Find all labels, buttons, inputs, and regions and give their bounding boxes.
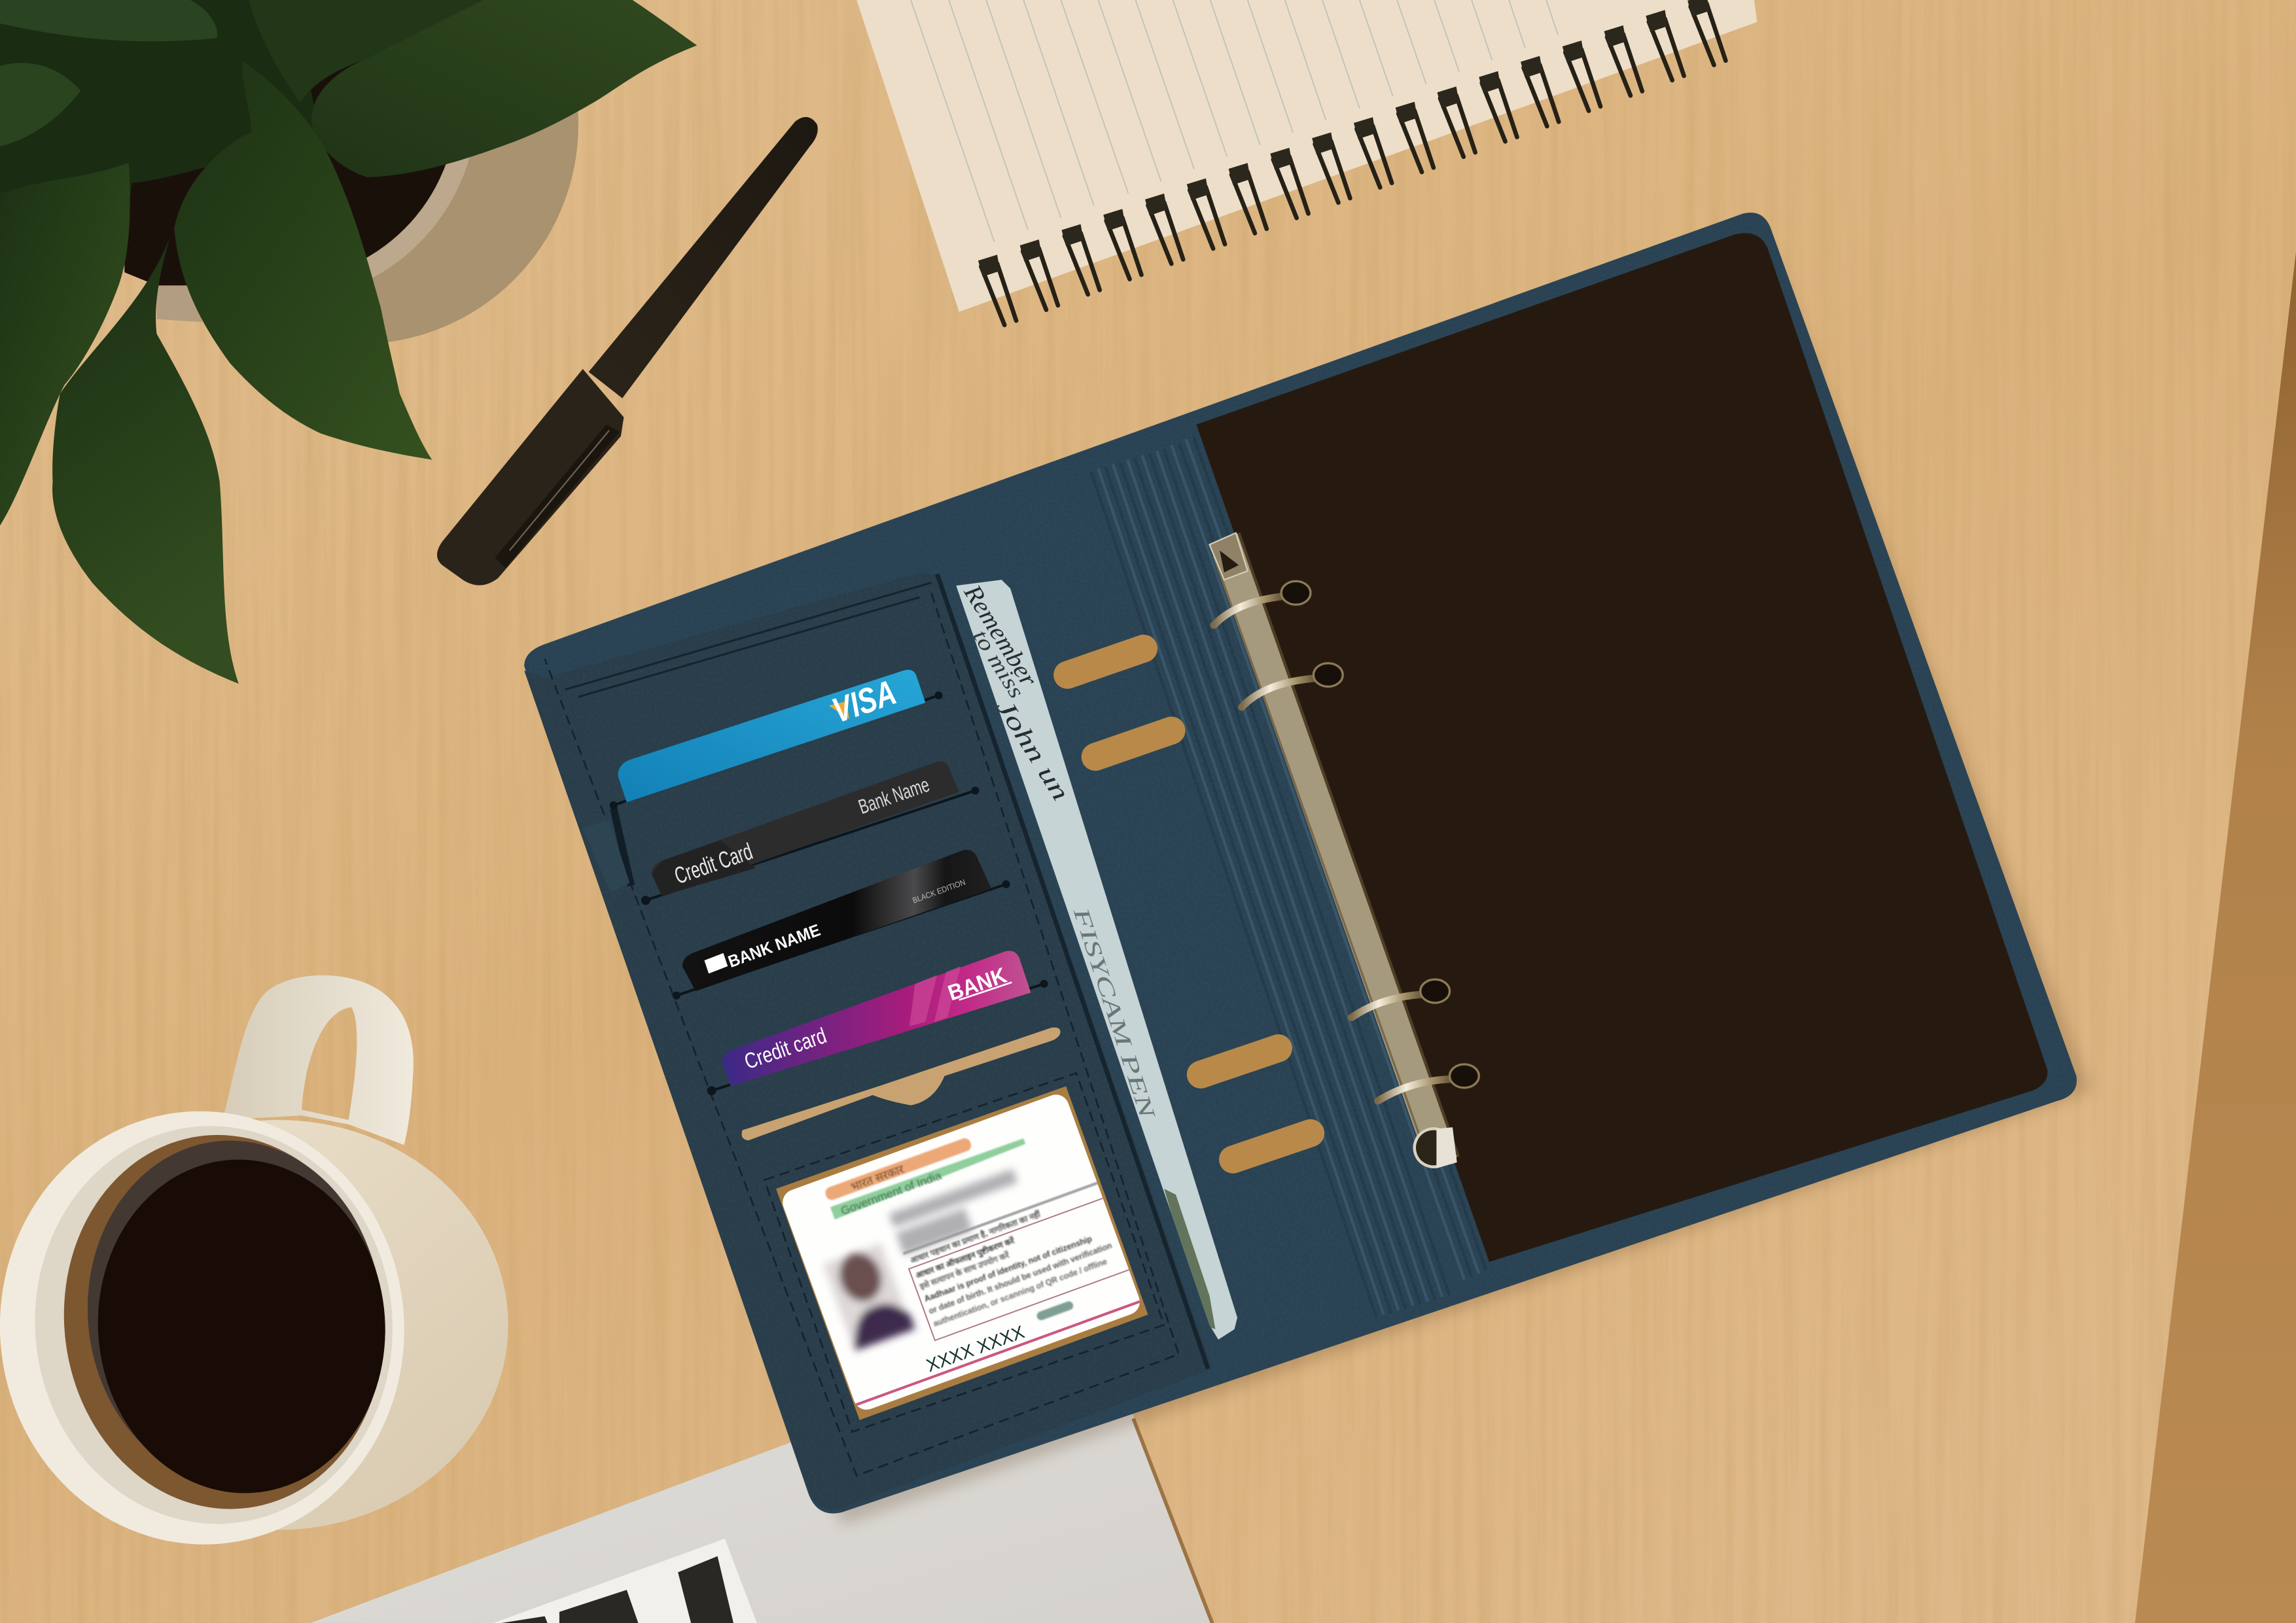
banknote print	[1164, 1189, 1215, 1329]
card: VISA	[618, 670, 925, 802]
bank name text: BANK NAME	[726, 921, 823, 971]
info box: आधार का ऑफलाइन पुष्टीकरण करें	[914, 1235, 1016, 1281]
coffee foam	[43, 1117, 405, 1527]
credit card label: Credit Card	[671, 838, 756, 889]
blurred photo	[823, 1242, 915, 1351]
footer line	[855, 1300, 1141, 1406]
note handwriting: to miss	[968, 625, 1029, 703]
coffee cup	[0, 975, 508, 1558]
info box	[903, 1178, 1141, 1340]
pot	[79, 0, 578, 344]
lower pocket flap	[614, 808, 631, 886]
organizer cover	[524, 213, 2077, 1513]
notebook ruled lines	[911, 0, 1558, 241]
leaf: top right	[311, 0, 697, 177]
binder end caps	[1209, 533, 1458, 1172]
blurred VID	[1036, 1300, 1074, 1321]
leaf: upper left	[0, 0, 217, 41]
brown paper sheet	[1196, 233, 2047, 1262]
info box: इसे सत्यापन के साथ उपयोग करें	[918, 1249, 1011, 1291]
blurred name	[889, 1169, 1028, 1255]
leather texture	[520, 205, 2087, 1522]
spiral binding	[978, 0, 1725, 325]
hindi heading: भारत सरकार	[849, 1162, 906, 1194]
note handwriting: Remember	[958, 580, 1042, 691]
cup rim	[0, 1098, 419, 1558]
government label: Government of India	[839, 1169, 943, 1217]
binder rings	[1214, 581, 1479, 1101]
ID window	[776, 1087, 1148, 1420]
pen	[437, 117, 818, 585]
leaf: bottom	[52, 237, 239, 684]
card: dark credit card	[652, 761, 959, 896]
note pen text: FISYCAM PEN	[1068, 904, 1159, 1123]
thumb cutout	[741, 1028, 1061, 1140]
VISA logo: VISA	[827, 672, 901, 731]
info box: authentication, or scanning of QR code / offline	[932, 1257, 1108, 1329]
bank logo	[704, 953, 728, 973]
potted plant	[0, 0, 697, 684]
spine ribs	[1091, 436, 1486, 1318]
cup handle	[222, 975, 414, 1145]
edition text: BLACK EDITION	[911, 877, 966, 905]
ID window stitching	[764, 1073, 1164, 1432]
green band	[830, 1137, 1027, 1219]
leaf: centre	[174, 61, 432, 460]
organizer	[520, 205, 2091, 1526]
leaf: mid left	[0, 63, 80, 147]
card slot shadows	[611, 693, 1047, 1094]
bank label: BANK	[945, 964, 1010, 1006]
ring binder bar	[1209, 533, 1458, 1167]
pouch panel	[524, 572, 1212, 1509]
ID card	[779, 1087, 1156, 1414]
note handwriting: John un	[991, 694, 1074, 806]
credit card label: Credit card	[741, 1024, 830, 1074]
info box: or date of birth. It should be used with verification	[928, 1241, 1113, 1316]
card: black edition	[682, 850, 991, 991]
bank name label: Bank Name	[856, 773, 932, 818]
notebook	[857, 0, 1757, 325]
coffee surface reflection	[73, 1128, 395, 1498]
organizer shadow	[544, 249, 2091, 1526]
info box: Aadhaar is proof of identity, not of citizenship	[923, 1234, 1093, 1304]
card: purple	[722, 951, 1031, 1087]
info box: आधार पहचान का प्रमाण है, नागरिकता का नहीं	[909, 1209, 1042, 1265]
laptop keys	[498, 1556, 733, 1623]
cup inner wall	[18, 1111, 409, 1539]
desk edge: darker lower surface	[2135, 252, 2296, 1623]
cup body	[48, 1120, 508, 1530]
leaf: top right upper lobe	[249, 0, 484, 103]
aadhaar number: XXXX XXXX	[924, 1321, 1027, 1376]
leaves: dark top left mass	[0, 0, 322, 249]
leaf: far left	[0, 162, 130, 525]
laptop corner	[309, 1354, 1212, 1623]
stitching	[544, 593, 1178, 1476]
top pocket slit	[565, 583, 931, 697]
saffron band	[824, 1137, 973, 1202]
binder slots	[1067, 648, 1311, 1159]
paper note strip	[956, 580, 1237, 1340]
pouch edge shadow	[937, 574, 1208, 1369]
coffee	[87, 1150, 397, 1503]
